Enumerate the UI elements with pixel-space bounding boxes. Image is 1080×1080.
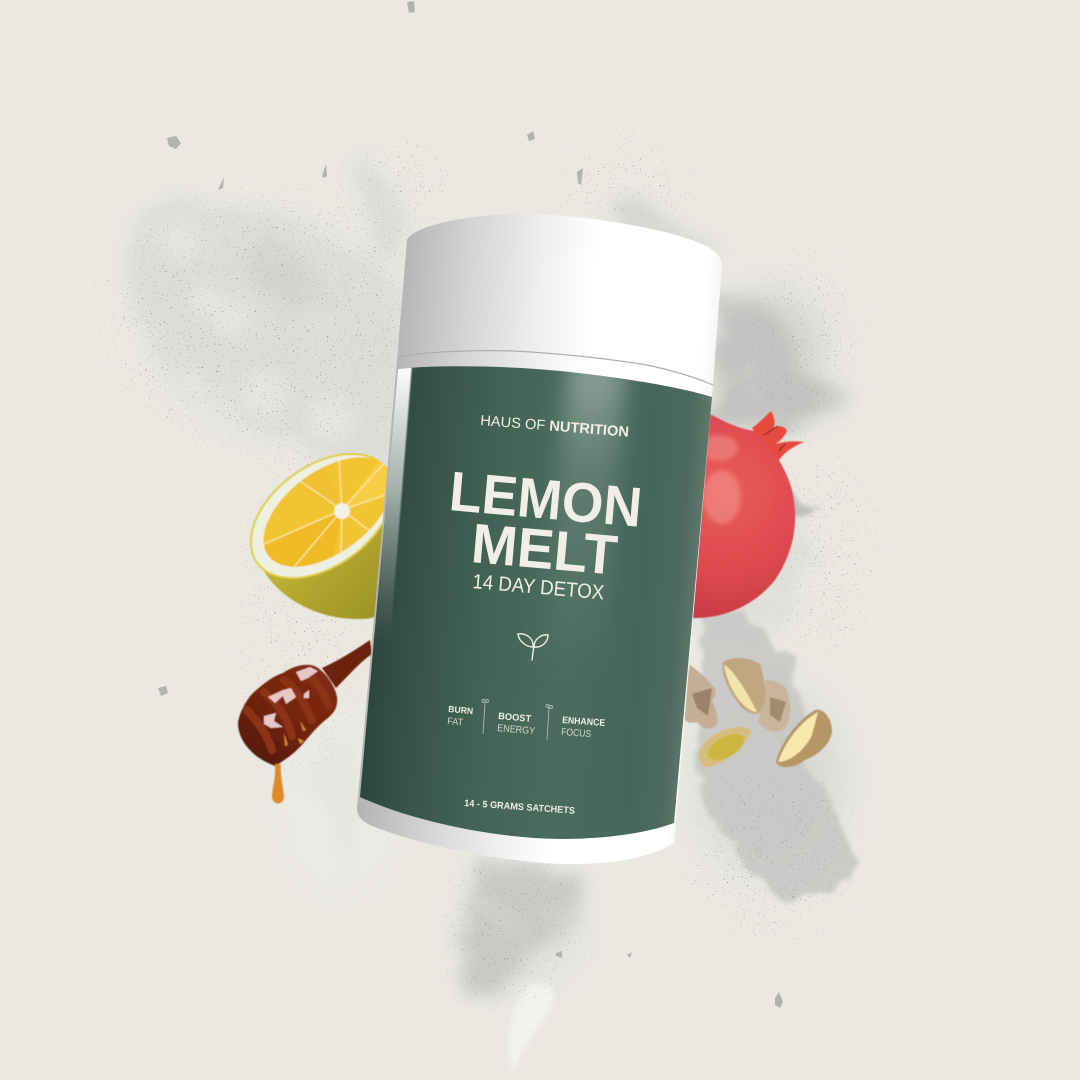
benefit: burn fat: FAT (447, 716, 464, 728)
icon: lemon half (249, 452, 388, 620)
product jar (340, 214, 730, 864)
jar body and lid (357, 214, 722, 864)
divider sprout two (546, 704, 552, 740)
ginger chunk right (758, 680, 790, 732)
brand name: HAUS OF NUTRITION (480, 413, 629, 441)
subtitle: 14 DAY DETOX (472, 570, 605, 605)
ginger chunk left (684, 665, 718, 729)
icon: honey dipper (238, 640, 372, 804)
powder: left cloud puffs (160, 220, 354, 444)
label fill (360, 366, 712, 839)
benefit: boost energy (497, 711, 536, 737)
benefit: enhance focus (561, 715, 605, 740)
powder: white wisp (509, 984, 554, 1072)
dipper amber flecks (284, 721, 306, 746)
pomegranate body (680, 415, 795, 618)
pomegranate highlights (698, 435, 738, 461)
title: melt: MELT (469, 511, 620, 587)
dipper head (238, 665, 337, 766)
powder: speckles (100, 140, 875, 1010)
powder: soft haze (160, 230, 840, 975)
benefit: burn fat (447, 704, 474, 728)
label highlight (552, 371, 635, 600)
benefit: enhance focus: FOCUS (561, 727, 592, 740)
powder: chunks (158, 1, 783, 1008)
label left reflection (374, 365, 412, 640)
powder: lower right plume (695, 490, 852, 896)
dipper ridges (247, 672, 329, 750)
green label (360, 366, 712, 839)
ginger slice right (776, 710, 832, 767)
crown stems (764, 426, 785, 451)
powder explosion (100, 1, 875, 1072)
lemon rim (228, 429, 416, 603)
title: lemon: LEMON (447, 459, 645, 539)
ginger slice lower (699, 727, 751, 767)
dipper handle (322, 640, 372, 688)
lemon flesh (262, 456, 388, 568)
powder: left cloud (130, 150, 845, 880)
icon: pomegranate (680, 411, 804, 618)
benefit: boost energy: ENERGY (497, 723, 536, 737)
ginger slice top (723, 658, 765, 714)
lid seam (398, 351, 713, 385)
footer: satchet count: 14 - 5 GRAMS SATCHETS (464, 798, 575, 817)
benefit: burn fat: BURN (448, 704, 474, 716)
dipper highlights (264, 667, 318, 728)
pomegranate crown (752, 411, 804, 460)
icon: ginger pieces (684, 658, 832, 767)
icon: sprout (518, 634, 548, 660)
honey drip (272, 764, 284, 804)
divider sprout one (482, 700, 488, 734)
powder: bottom plume (462, 865, 580, 998)
benefit: boost energy: BOOST (498, 711, 532, 725)
lemon core (334, 503, 350, 519)
benefit: enhance focus: ENHANCE (562, 715, 605, 729)
lemon body (258, 470, 396, 619)
